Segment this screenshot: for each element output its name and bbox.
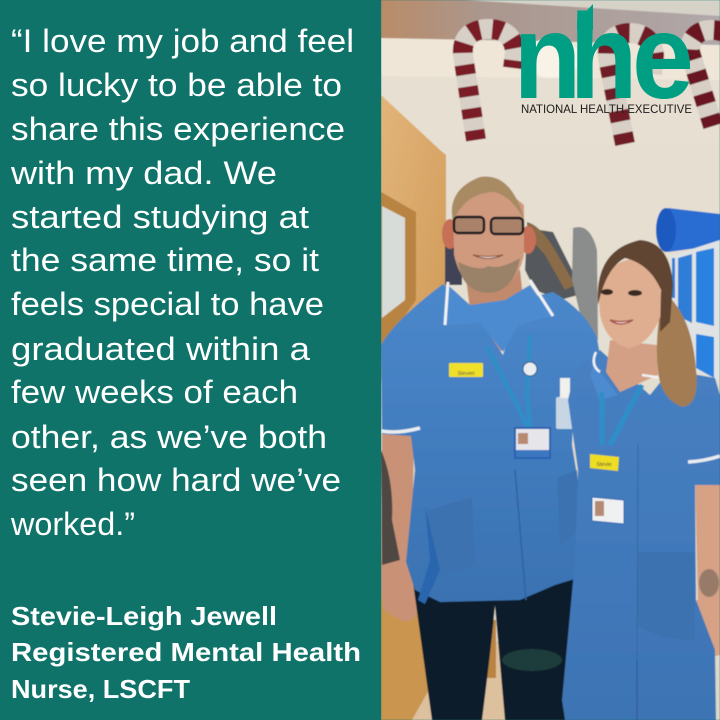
woman's arm and hand (681, 478, 720, 657)
quote text: few weeks of each (11, 374, 298, 410)
woman's name badge: Stevie (596, 462, 612, 468)
quote text: share this experience (11, 111, 345, 147)
dress trim and pocket (637, 445, 720, 720)
quote text: other, as we’ve both (11, 419, 327, 455)
tunic trim and pockets (381, 280, 580, 604)
attribution (11, 601, 361, 704)
man's lanyard (487, 335, 530, 428)
panel: photo of two nurses (381, 0, 720, 720)
woman's dress (562, 350, 720, 720)
quote text (10, 23, 354, 542)
quote text: so lucky to be able to (11, 67, 342, 103)
quote text: worked.” (10, 506, 135, 542)
man's glasses (454, 217, 523, 234)
woman's lanyard (602, 385, 642, 445)
attribution: Registered Mental Health (11, 637, 361, 667)
woman's tattoo (699, 569, 719, 597)
woman's ponytail (657, 292, 697, 407)
panel: quote (0, 0, 381, 720)
quote text: with my dad. We (10, 155, 277, 191)
blue storage bin and lockers (656, 208, 720, 380)
attribution: Nurse, LSCFT (11, 674, 190, 704)
candy cane decorations (463, 29, 720, 144)
man in blue tunic (381, 177, 600, 720)
quote text: “I love my job and feel (11, 23, 354, 59)
man's tattooed arm and hand (381, 430, 418, 621)
man's neck (465, 270, 525, 352)
man's ID card (515, 428, 550, 458)
man's tunic (381, 284, 600, 602)
quote text: started studying at (11, 199, 309, 235)
man's head (442, 177, 536, 293)
room background (381, 0, 720, 720)
quote text: the same time, so it (11, 242, 319, 278)
quote text: feels special to have (11, 286, 324, 322)
man's name badge: Steven (457, 371, 475, 377)
wooden door with window (381, 95, 600, 720)
quote text: graduated within a (11, 331, 310, 367)
woman's neck and collar (590, 340, 662, 400)
woman in blue dress (562, 240, 720, 720)
man's trousers (412, 575, 575, 720)
woman's ID card (592, 497, 624, 524)
attribution: Stevie-Leigh Jewell (11, 601, 277, 631)
woman's head (598, 240, 673, 348)
logo: National Health Executive: NATIONAL HEALTH EXECUTIVE (521, 102, 692, 116)
coats on hooks (445, 222, 598, 340)
woman's name badge (590, 454, 619, 471)
badge and hand sanitiser (523, 362, 573, 429)
man's name badge (449, 363, 483, 377)
quote text: seen how hard we’ve (11, 462, 341, 498)
